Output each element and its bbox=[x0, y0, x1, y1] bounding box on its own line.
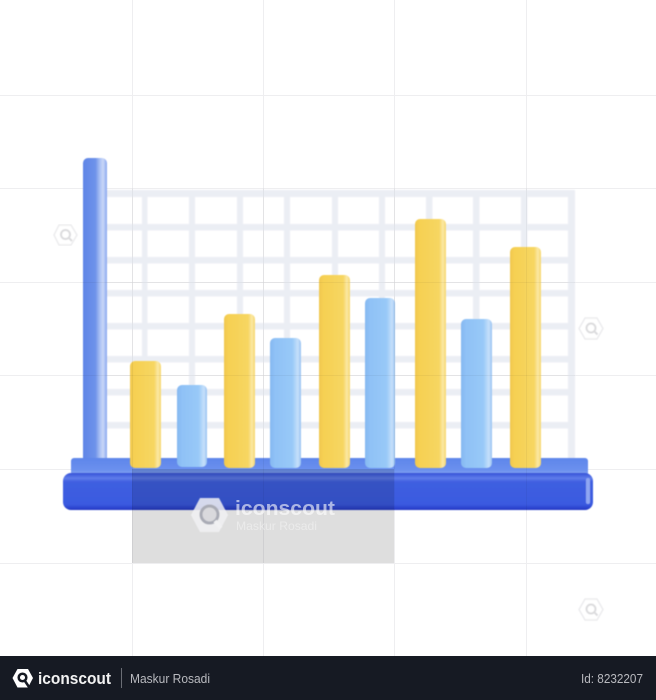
bar 2 blue bbox=[177, 385, 207, 467]
watermark: small hexagon right bbox=[579, 318, 603, 339]
footer logo bbox=[12, 669, 33, 688]
watermark logo bbox=[191, 498, 228, 532]
footer id: Id: 8232207 bbox=[581, 672, 643, 686]
watermark band bbox=[132, 469, 394, 563]
footer author: Maskur Rosadi bbox=[130, 672, 210, 686]
bar 8 blue bbox=[461, 319, 492, 468]
bar chart bbox=[130, 219, 541, 468]
bar 6 blue bbox=[365, 298, 395, 468]
chart back grid bbox=[105, 190, 575, 462]
y axis post bbox=[83, 158, 107, 464]
footer brand: iconscout bbox=[38, 670, 111, 688]
bar 5 yellow bbox=[319, 275, 350, 468]
base rod bbox=[63, 473, 593, 510]
watermark: small hexagon bottom right bbox=[579, 599, 603, 620]
watermark brand text: iconscout bbox=[235, 497, 335, 520]
base plate bbox=[71, 458, 588, 476]
watermark author text: Maskur Rosadi bbox=[236, 519, 317, 533]
bar 1 yellow bbox=[130, 361, 161, 468]
bar 4 blue bbox=[270, 338, 301, 468]
bar 7 yellow bbox=[415, 219, 446, 468]
watermark: small hexagon left bbox=[54, 225, 77, 245]
bar 9 yellow bbox=[510, 247, 541, 468]
bar 3 yellow bbox=[224, 314, 255, 468]
guide lines over icon bbox=[83, 188, 575, 510]
footer divider bbox=[121, 668, 122, 688]
footer bar bbox=[0, 656, 656, 700]
